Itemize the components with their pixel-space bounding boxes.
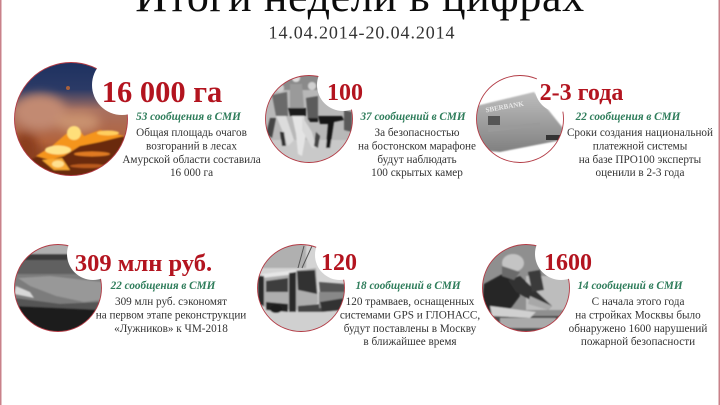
description: возгораний в лесах [146, 140, 237, 152]
date range: 14.04.2014-20.04.2014 [269, 22, 455, 42]
figure: 120: 120 [321, 250, 357, 276]
description: 309 млн руб. сэкономят [115, 296, 227, 308]
figure: 2-3 years: 2-3 года [540, 80, 623, 106]
mentions count: 37 сообщений в СМИ [359, 111, 466, 123]
photo: tram [257, 244, 345, 332]
mentions count: 22 сообщения в СМИ [575, 111, 681, 123]
description [340, 296, 480, 348]
description: С начала этого года [592, 296, 684, 308]
description: на первом этапе реконструкции [96, 310, 246, 322]
description: на базе ПРО100 эксперты [579, 154, 702, 166]
description [96, 296, 246, 335]
description [358, 127, 476, 179]
photo: runners [265, 75, 353, 163]
description: системами GPS и ГЛОНАСС, [340, 310, 480, 322]
panel: Luzhniki [14, 244, 246, 334]
panel: Boston marathon [265, 75, 476, 178]
description: За безопасностью [374, 127, 460, 139]
photo: fire [14, 62, 128, 176]
description: Общая площадь очагов [136, 127, 247, 139]
card brand: SBERBANK [485, 100, 525, 114]
description: «Лужников» к ЧМ-2018 [114, 323, 228, 335]
description: 120 трамваев, оснащенных [346, 296, 475, 308]
description: в ближайшее время [363, 336, 457, 348]
description: на бостонском марафоне [358, 140, 476, 152]
description [567, 127, 713, 179]
description: Сроки создания национальной [567, 127, 713, 139]
description: пожарной безопасности [581, 336, 695, 348]
photo: builders [482, 244, 570, 332]
panel: fire safety violations [482, 244, 708, 348]
description [569, 296, 707, 348]
right red border [718, 0, 720, 405]
description: будут поставлены в Москву [344, 323, 477, 335]
mentions count: 53 сообщения в СМИ [136, 111, 241, 123]
mentions count: 22 сообщения в СМИ [110, 280, 216, 292]
figure: 1600: 1600 [544, 250, 592, 276]
panel: forest fires [11, 55, 261, 179]
description: оценили в 2-3 года [596, 167, 684, 179]
mentions count: 18 сообщений в СМИ [355, 280, 461, 292]
description: 16 000 га [170, 167, 213, 179]
figure: 309 mln rub: 309 млн руб. [75, 250, 212, 277]
description: 100 скрытых камер [371, 167, 463, 179]
description: Амурской области составила [122, 154, 261, 166]
description: будут наблюдать [377, 154, 457, 166]
panel: payment system [476, 75, 713, 178]
left red border [0, 0, 2, 405]
description: обнаружено 1600 нарушений [569, 323, 707, 335]
description [122, 127, 261, 179]
mentions count: 14 сообщений в СМИ [577, 280, 683, 292]
photo: bank card [476, 75, 564, 163]
photo: stadium [14, 244, 102, 332]
panel: trams [257, 244, 480, 348]
figure: 100: 100 [327, 80, 363, 106]
figure: 16 000 ha: 16 000 га [102, 75, 222, 109]
description: платежной системы [593, 140, 688, 152]
description: на стройках Москвы было [575, 310, 701, 322]
